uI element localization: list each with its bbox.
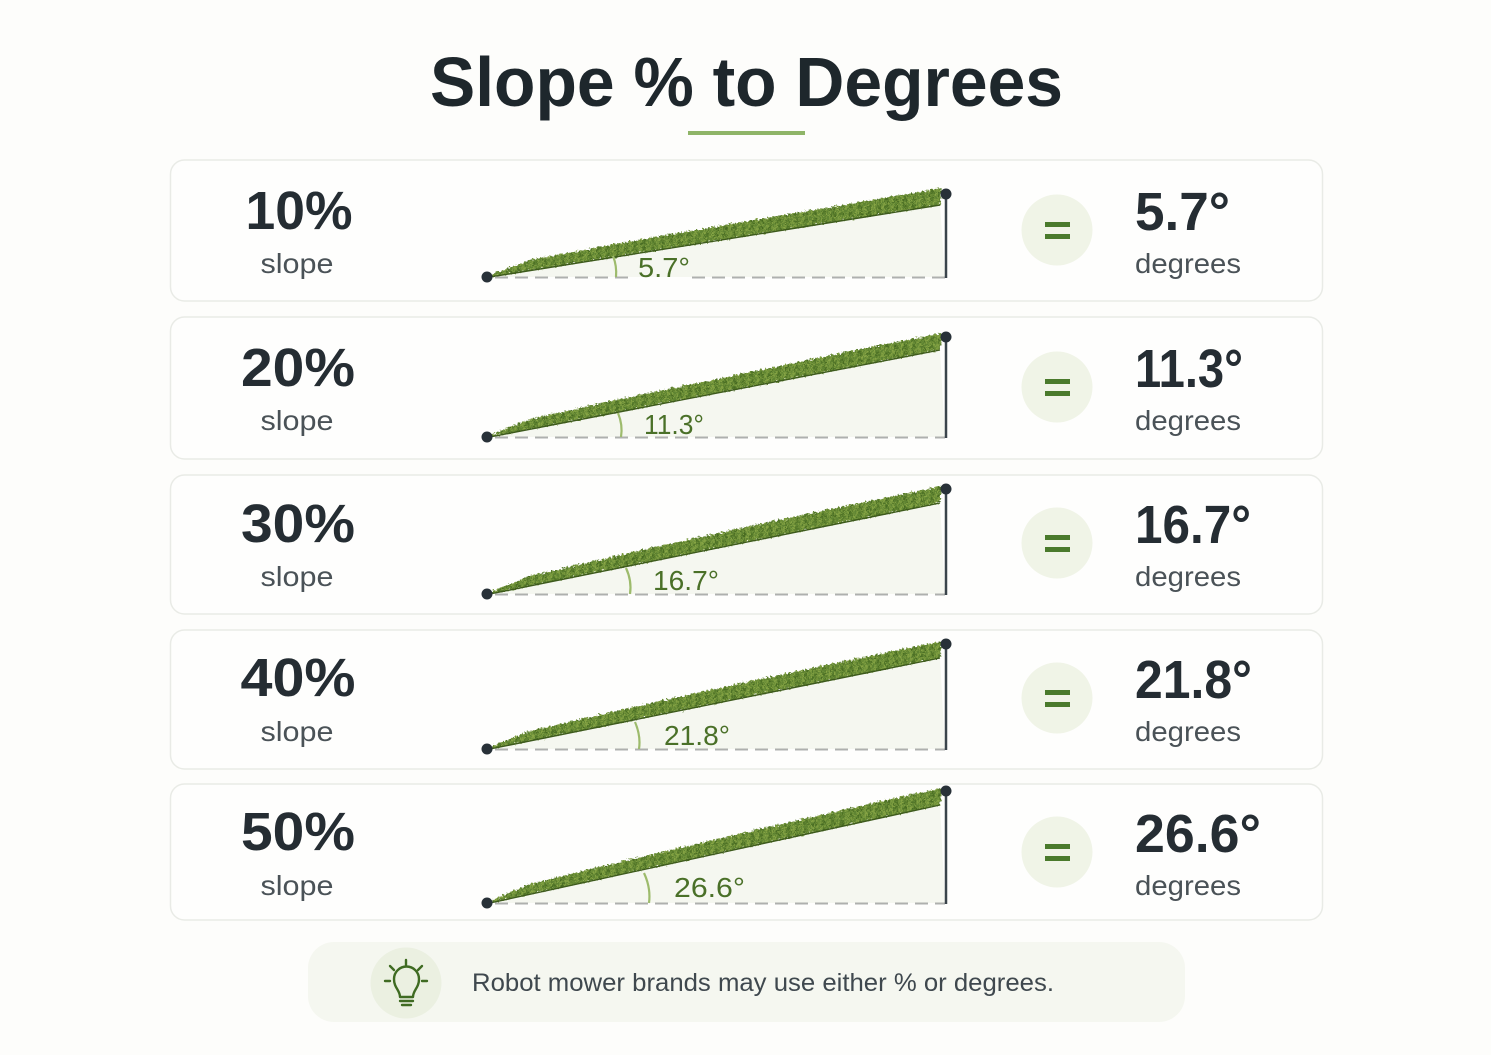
slope diagram 11.3 degrees: 11.3° <box>644 409 704 440</box>
degrees value 11.3: 11.3° <box>1135 339 1243 399</box>
slope diagram 5.7 degrees <box>482 188 952 283</box>
degrees label: degrees <box>1135 870 1241 901</box>
degrees label: degrees <box>1135 716 1241 747</box>
slope value 10%: 10% <box>246 181 352 241</box>
slope label: slope <box>260 870 334 901</box>
slope value 40%: 40% <box>240 648 356 708</box>
equals badge <box>1022 508 1092 578</box>
degrees value 21.8: 21.8° <box>1135 650 1252 710</box>
slope diagram 5.7 degrees: 5.7° <box>638 252 690 283</box>
slope value 50%: 50% <box>241 802 355 862</box>
slope label: slope <box>260 716 334 747</box>
slope diagram 16.7 degrees <box>482 484 952 600</box>
degrees value 26.6: 26.6° <box>1135 804 1261 864</box>
equals badge <box>1022 662 1092 734</box>
slope value 20%: 20% <box>241 338 355 398</box>
slope label: slope <box>260 248 334 279</box>
panel: 30% row <box>170 475 1322 614</box>
degrees value 5.7: 5.7° <box>1135 182 1230 242</box>
slope diagram 21.8 degrees <box>482 638 952 754</box>
degrees label: degrees <box>1135 405 1241 436</box>
slope label: slope <box>260 561 334 592</box>
slope diagram 26.6 degrees: 26.6° <box>674 872 745 903</box>
panel: 20% row <box>170 317 1322 459</box>
slope diagram 21.8 degrees: 21.8° <box>664 720 730 751</box>
equals badge <box>1022 816 1092 888</box>
panel: 10% row <box>170 160 1322 301</box>
slope diagram 16.7 degrees: 16.7° <box>653 565 719 596</box>
title underline <box>688 131 805 135</box>
degrees label: degrees <box>1135 561 1241 592</box>
degrees label: degrees <box>1135 248 1241 279</box>
callout: tip <box>308 942 1185 1022</box>
slope diagram 11.3 degrees <box>482 332 952 442</box>
equals badge <box>1022 194 1092 266</box>
slope label: slope <box>260 405 334 436</box>
panel: 50% row <box>170 784 1322 920</box>
equals badge <box>1022 352 1092 422</box>
panel: 40% row <box>170 630 1322 769</box>
title: Slope % to Degrees <box>430 43 1063 121</box>
tip text: Robot mower brands may use either % or degrees. <box>472 969 1054 997</box>
degrees value 16.7: 16.7° <box>1135 495 1251 555</box>
icon: light bulb <box>370 948 442 1018</box>
slope value 30%: 30% <box>241 494 355 554</box>
slope diagram 26.6 degrees <box>482 786 952 908</box>
